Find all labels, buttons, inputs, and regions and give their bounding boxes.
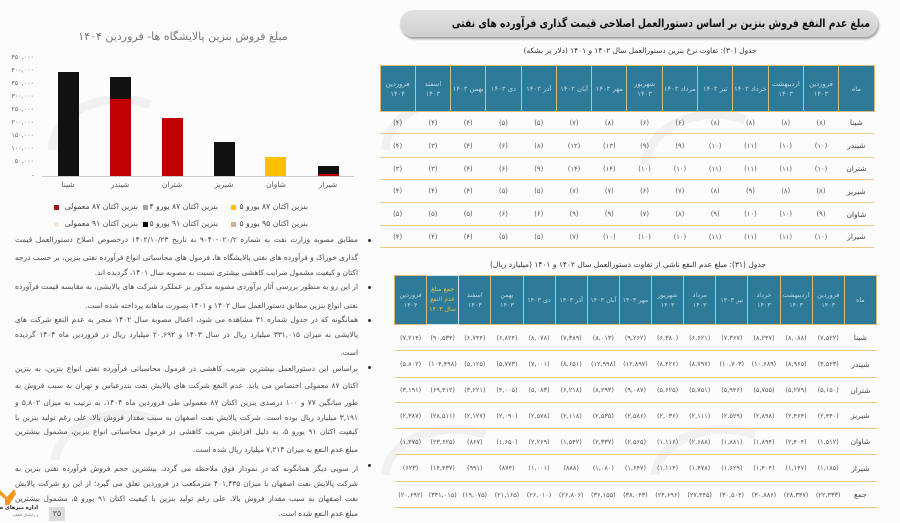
table 31: lost profit: ۱۴۰۳: [757, 301, 771, 309]
table 31: lost profit: (۲,۴۰۴): [786, 438, 807, 446]
table 31: lost profit: (۲,۰۳۶): [657, 412, 678, 420]
table 30: rate differences: (۱۱): [744, 232, 757, 240]
table 31: lost profit: شیریز: [851, 411, 870, 420]
y axis labels: ۵۰,۰۰۰: [15, 157, 34, 165]
table 30: rate differences: (۶): [499, 210, 508, 218]
table 30: rate differences: (۱۰): [638, 232, 651, 240]
baseline: [42, 176, 354, 177]
table 30: rate differences: شتران: [846, 164, 866, 173]
legend: بنزین اکتان ۸۷ یورو ۵: [239, 202, 308, 211]
y axis labels: ۲۰۰,۰۰۰: [11, 118, 34, 126]
table 31: lost profit: ۱۴۰۳: [821, 301, 835, 309]
table 30: rate differences: شینا: [850, 118, 863, 127]
table 31: lost profit: جمع: [854, 490, 867, 499]
table 30: rate differences: (۶): [499, 164, 508, 172]
table 31: lost profit: ۱۴۰۳: [789, 301, 803, 309]
table 31: lost profit: (۱۲,۹۹۸): [591, 360, 616, 368]
table 30: rate differences: اسفند: [425, 80, 441, 88]
table 30: rate differences: (۸): [817, 118, 826, 126]
table 31: lost profit: شاوان: [851, 437, 870, 446]
table 30: rate differences: (۸): [817, 187, 826, 195]
category labels: شاوان: [266, 180, 286, 189]
category labels: [61, 180, 337, 189]
table 31: lost profit: (۲,۵۷۸): [528, 412, 550, 420]
table 31: lost profit: (۱,۸۸۱): [721, 438, 742, 446]
text block: analysis paragraphs: براساس این دستورالعمل بیشترین ضریب کاهشی در فرمول محاسباتی فرآورده نفتی انواع بنزین، به بنزین: [15, 364, 358, 373]
table 30: rate differences: فروردین: [809, 80, 833, 88]
table 30: rate differences: شاوان: [847, 210, 866, 218]
table 31: lost profit: ۱۴۰۴: [404, 301, 417, 309]
table 31: lost profit: (۸۸۸): [563, 464, 579, 472]
table 30: rate differences: (۱۱): [779, 164, 792, 172]
table 30: rate differences: (۱۰): [815, 164, 827, 172]
y axis labels: ۲۵۰,۰۰۰: [11, 105, 34, 113]
table 30: rate differences: (۴): [464, 142, 473, 150]
category labels: شیراز: [319, 180, 337, 189]
y axis labels: ۳۰۰,۰۰۰: [11, 92, 34, 100]
table 31: lost profit: آذر ۱۴۰۳: [559, 296, 583, 304]
table 31: lost profit: تیر ۱۴۰۳: [720, 296, 743, 304]
table 30: rate differences: (۴): [393, 142, 402, 150]
table 31: lost profit: (۳,۲۲۱): [464, 386, 485, 394]
table 30: rate differences: (۱۰): [674, 232, 686, 240]
table 31: lost profit: (۲,۸۹۸): [753, 412, 774, 420]
table 30: rate differences: (۸): [781, 118, 790, 126]
category labels: شینا: [61, 180, 75, 189]
table 31: lost profit: شهریور: [658, 291, 678, 299]
table 31: lost profit: (۳۶,۱۵۵): [591, 490, 616, 498]
table 30: rate differences: (۴): [428, 232, 437, 240]
bar: Shana: [58, 72, 79, 176]
table 31: lost profit: (۸,۹۶۵): [786, 360, 807, 368]
y axis labels: ۱۰۰,۰۰۰: [11, 144, 34, 152]
table 31: lost profit: (۱,۶۲۹): [721, 464, 742, 472]
table 31: lost profit: شیراز: [851, 464, 869, 472]
category labels: شیندر: [111, 180, 129, 189]
table 30: rate differences: (۸): [675, 210, 684, 218]
legend: بنزین اکتان ۹۱ معمولی: [65, 219, 138, 228]
table 30: rate differences: (۱۰): [709, 142, 721, 150]
table 31: lost profit: (۲۰,۶۹۲): [398, 490, 423, 498]
category labels: شتران: [162, 180, 182, 189]
table 31: lost profit: (۶۲۳): [403, 464, 418, 472]
table 30: rate differences: (۴): [393, 187, 402, 195]
logo: orange mark and department name: [0, 489, 38, 517]
table 31: lost profit: (۴,۵۲۳): [818, 360, 839, 368]
table 31: lost profit: خرداد: [756, 291, 771, 299]
table 30: rate differences: (۴): [464, 232, 473, 240]
table 31: lost profit: عدم النفع: [430, 296, 455, 303]
table 30: rate differences: (۷): [605, 187, 614, 195]
table 30: rate differences: (۴): [464, 187, 473, 195]
table 30: rate differences: (۵): [393, 210, 402, 218]
table 31: lost profit: (۷,۳۶۷): [721, 334, 742, 342]
table 30: rate differences: (۶): [499, 142, 508, 150]
legend: بنزین اکتان ۹۱ یورو ۵: [149, 219, 218, 228]
table 31: lost profit: مرداد: [692, 291, 707, 299]
table 31: lost profit: (۱,۱۱۶): [657, 438, 678, 446]
table 31: lost profit: شینا: [854, 333, 867, 342]
table 30: rate differences: (۵): [428, 210, 437, 218]
table 31: lost profit: (۳۸,۰۴۳): [623, 490, 648, 498]
table 31: lost profit: (۳,۱۹۱): [400, 386, 421, 394]
table 31: lost profit: (۸۷۴): [499, 464, 515, 472]
table 31: lost profit: شتران: [850, 386, 870, 394]
bar: Shiraz stacked: [318, 166, 339, 176]
table 30: rate differences: (۱۰): [779, 210, 792, 218]
text block: analysis paragraphs: مبلغ عدم النفع شده است.: [278, 509, 358, 518]
table 30: rate differences: (۵): [534, 118, 543, 126]
table 30: rate differences: تیر ۱۴۰۳: [703, 84, 727, 92]
title text: مبلغ عدم النفع فروش بنزین بر اساس دستورالعمل اصلاحی قیمت گذاری فرآورده های نفتی: [452, 16, 870, 30]
table 31: lost profit: (۲,۱۱۸): [561, 412, 582, 420]
table 30: rate differences: (۱۱): [709, 164, 721, 172]
legend: بنزین اکتان ۸۷ یورو ۴: [149, 202, 218, 211]
table 31: lost profit: (۹,۲۶۲): [625, 334, 646, 342]
legend: بنزین اکتان ۹۵ یورو ۵: [239, 219, 308, 228]
table 31: lost profit: ۱۴۰۳: [693, 301, 707, 309]
table 30: rate differences: (۴): [464, 164, 473, 172]
table 30: rate differences: (۹): [605, 210, 614, 218]
table 31: lost profit: فروردین: [399, 291, 422, 299]
table 30: rate differences: ۱۴۰۳: [778, 90, 793, 98]
table 31: lost profit: (۶۹,۴۱۲): [430, 386, 455, 394]
table 31: lost profit: (۲۶,۸۰۶): [559, 490, 583, 498]
table 30: rate differences: (۵): [499, 187, 508, 195]
table 31: lost profit: (۵,۰۸۳): [528, 386, 550, 394]
table 30: rate differences: (۷): [675, 187, 684, 195]
table 31: lost profit: ۱۴۰۳: [468, 301, 482, 309]
table 30: rate differences: (۹): [570, 210, 579, 218]
table 30: rate differences: (۵): [499, 232, 508, 240]
text block: analysis paragraphs: پالایشی به میزان ۳۳۱,۰۱۵ میلیارد ریال در سال ۱۴۰۳ و ۲۰,۶۹۲ میلیارد ریال در فروردین ماه ۱۴۰۴ گردیده: [15, 330, 358, 339]
table 31: lost profit: (۹۹۱): [467, 464, 483, 472]
table 31: lost profit: (۲,۱۲۷): [464, 412, 485, 420]
table 30: rate differences: (۹): [817, 210, 826, 218]
table 31: lost profit: (۲,۴۴۰): [818, 412, 839, 420]
table 31: lost profit: (۱,۴۰۴): [753, 464, 774, 472]
table 31: lost profit: (۸۶۷): [467, 438, 483, 446]
table 31: lost profit: (۳۳۱,۰۱۵): [429, 490, 457, 498]
table 31: lost profit: (۲۶,۰۱۰): [527, 490, 551, 498]
logo: orange mark and department name: و رایانه‌ای تحلیلی: [13, 513, 38, 517]
table 31: lost profit: سال ۱۴۰۳: [429, 306, 456, 313]
table 30: rate differences: (۱۱): [744, 142, 757, 150]
table 30: rate differences: (۱۰): [674, 164, 686, 172]
table 30: rate differences: (۱۰): [779, 142, 792, 150]
table 30: rate differences: (۷): [640, 210, 649, 218]
table 30 caption: جدول (۳۰): تفاوت نرخ بنزین دستورالعمل سال ۱۴۰۲ و ۱۴۰۱ (دلار بر بشکه): [523, 46, 756, 55]
table 31: lost profit: (۱۹,۰۷۵): [462, 490, 487, 498]
legend: بنزین اکتان ۸۷ معمولی: [65, 202, 138, 211]
table 31: lost profit: (۵,۹۴۶): [721, 386, 742, 394]
table 31: lost profit: مهر ۱۴۰۳: [623, 296, 648, 304]
chart: gasoline sales by refinery: [11, 30, 354, 228]
table 31: lost profit: (۱۲,۸۹۷): [623, 360, 648, 368]
table 31: lost profit: (۴,۰۰۵): [496, 386, 517, 394]
table 30: rate differences: (۸): [534, 142, 543, 150]
table 30: rate differences: (۳): [393, 164, 402, 172]
table 31: lost profit: (۶,۷۴۴): [464, 334, 485, 342]
text block: analysis paragraphs: نفتی انواع بنزین مطابق دستورالعمل سال ۱۴۰۲ و ۱۴۰۱ بصورت ماهانه پرداخته شده است.: [85, 301, 358, 310]
table 31: lost profit: آبان ۱۴۰۳: [590, 296, 616, 304]
table 31: lost profit: اسفند: [467, 291, 483, 299]
table 31: lost profit: (۲,۳۳۷): [593, 438, 614, 446]
table 31: lost profit: (۱,۶۴۷): [625, 464, 646, 472]
table 31: lost profit: (۶,۲۱۸): [561, 386, 582, 394]
table 31: lost profit: (۲,۵۶۵): [625, 438, 646, 446]
table 31: lost profit: (۸,۰۱۳): [593, 334, 614, 342]
table 31: lost profit: (۲۴,۶۹۶): [655, 490, 680, 498]
table 30: rate differences: (۶): [675, 118, 684, 126]
table 31: lost profit: (۲۳,۶۲۵): [430, 438, 455, 446]
table 30: rate differences: (۵): [534, 187, 543, 195]
table 31: lost profit: (۵,۷۷۳): [496, 360, 517, 368]
text block: analysis paragraphs: نفت اصفهان به سبب مقدار فروش بالا، علی رغم تولید بنزین با کیفیت اکتان ۹۱ یورو ۵، مشمول بیشترین: [15, 494, 358, 503]
table 31: lost profit: (۱۰,۷۰۳): [720, 360, 744, 368]
table 31: lost profit: (۷,۰۰۱): [528, 360, 550, 368]
table 31: lost profit: (۳۰,۵۰۴): [720, 490, 744, 498]
text block: analysis paragraphs: اکتان و کیفیت مشمول ضرایب کاهشی بیشتری نسبت به مصوبه سال ۱۴۰۱، گردیده اند.: [95, 268, 358, 277]
table 30: rate differences: (۴): [464, 118, 473, 126]
table 30: rate differences: (۵): [499, 118, 508, 126]
table 31: lost profit: (۷,۳۸۹): [561, 334, 582, 342]
text block: analysis paragraphs: از این رو به منظور بررسی آثار برآوردی مصوبه مذکور بر عملکرد شرکت های پالایشی، به مقایسه قیمت فرآورده: [15, 282, 358, 291]
table 31: lost profit: (۱,۶۵۰): [496, 438, 517, 446]
text block: analysis paragraphs: مبلغ عدم النفع به میزان ۷,۲۱۴ میلیارد ریال شده است.: [193, 445, 358, 454]
y axis labels: -: [32, 171, 34, 179]
text block: analysis paragraphs: از سویی دیگر همانگونه که در نمودار فوق ملاحظه می گردد، بیشترین حجم فروش فرآورده نفتی بنزین به: [15, 464, 358, 473]
table 30: rate differences: (۵): [464, 210, 473, 218]
page number: [49, 507, 65, 521]
table 31: lost profit: (۲۸,۳۴۷): [784, 490, 808, 498]
legend: [54, 202, 308, 228]
table 31: lost profit: ماه: [856, 296, 865, 304]
table 31: lost profit: (۵,۲۷۹): [786, 386, 807, 394]
table 31: lost profit: (۱,۱۴۷): [786, 464, 807, 472]
table 30: rate differences: (۹): [640, 142, 649, 150]
table 30: rate differences: (۱۱): [744, 164, 757, 172]
table 30: rate differences: (۷): [570, 118, 579, 126]
text block: analysis paragraphs: کیفیت اکتان ۹۱ یورو ۵، به دلیل افزایش ضریب کاهشی در فرمول محاسباتی انواع بنزین، مشمول بیشترین: [15, 427, 358, 436]
table 31: lost profit: (۲,۰۹۰): [496, 412, 517, 420]
table 30: rate differences: (۱۱): [709, 232, 721, 240]
y axis labels: ۱۵۰,۰۰۰: [11, 131, 34, 139]
table 31: lost profit: (۸,۲۹۳): [593, 386, 614, 394]
table 31: lost profit: [394, 275, 877, 508]
table 31: lost profit: (۱,۱۱۴): [657, 464, 678, 472]
category labels: شیریز: [215, 180, 233, 189]
table 30: rate differences: (۸): [711, 118, 720, 126]
table 30: rate differences: (۶): [640, 187, 649, 195]
table 30: rate differences: (۴): [393, 232, 402, 240]
text block: analysis paragraphs: طور میانگین ۷۷ و ۱۰۰ درصدی بنزین اکتان ۸۷ معمولی طی فروردین ماه ۱۴۰۴، به ترتیب به میزان ۵,۸۰۲ و: [15, 398, 358, 407]
table 31: lost profit: (۱,۵۴۲): [561, 438, 582, 446]
chart title: مبلغ فروش بنزین پالایشگاه ها- فروردین ۱۴۰۴: [78, 30, 288, 43]
table 31: lost profit: (۲۷,۴۴۵): [687, 490, 712, 498]
table 30: rate differences: (۱۳): [603, 142, 616, 150]
table 31: lost profit: (۲,۶۸۸): [689, 438, 710, 446]
table 31: lost profit: (۸,۰۸۸): [786, 334, 807, 342]
text block: analysis paragraphs: گذاری خوراک و فرآورده های نفتی پالایشگاه ها، فرمول های محاسباتی انواع فرآورده نفتی بنزین، بر حسب درجه: [15, 253, 358, 262]
table 30: rate differences: خرداد ۱۴۰۳: [734, 84, 767, 92]
table 30: rate differences: ۱۴۰۴: [390, 90, 405, 98]
table 30: rate differences: (۴): [428, 187, 437, 195]
table 30: rate differences: ماه: [852, 84, 861, 92]
table 30: rate differences: (۹): [746, 187, 755, 195]
table 31: lost profit: (۶,۳۸۰): [657, 334, 678, 342]
table 30: rate differences: شیندر: [847, 141, 865, 150]
table 30: rate differences: (۱۴): [568, 164, 580, 172]
table 31: lost profit: (۸,۰۷۸): [528, 334, 550, 342]
table 30: rate differences: (۶): [640, 118, 649, 126]
table 30: rate differences: بهمن ۱۴۰۳: [453, 84, 484, 92]
table 31: lost profit: (۹۰,۵۳۴): [430, 334, 455, 342]
table 30: rate differences: (۹): [534, 164, 543, 172]
table 31: lost profit: (۱,۰۸۰): [593, 464, 614, 472]
table 30: rate differences: شهریور: [634, 80, 655, 88]
table 30: rate differences: ۱۴۰۳: [814, 90, 828, 98]
table 31: lost profit: (۳۰,۸۸۶): [752, 490, 776, 498]
table 31: lost profit: (۵,۷۵۱): [689, 386, 710, 394]
table 30: rate differences: (۱۱): [779, 232, 792, 240]
table 30: rate differences: (۴): [428, 118, 437, 126]
table 31 caption: جدول (۳۱): مبلغ عدم النفع ناشی از تفاوت دستورالعمل سال ۱۴۰۲ و ۱۴۰۱ (میلیارد ریال): [490, 260, 766, 269]
page number: ۳۵: [53, 509, 61, 518]
y axis labels: [11, 53, 34, 179]
table 31: lost profit: (۲,۱۱۱): [689, 412, 710, 420]
table 30: rate differences: (۵): [534, 232, 543, 240]
table 31: lost profit: (۲,۲۶۹): [528, 438, 550, 446]
table 31: lost profit: جمع مبلغ: [431, 286, 454, 293]
table 30: rate differences: دی ۱۴۰۳: [491, 84, 516, 92]
table 30: rate differences: ۱۴۰۳: [426, 90, 440, 98]
table 30: rate differences: (۹): [675, 142, 684, 150]
table 30: rate differences: (۸): [605, 118, 614, 126]
table 31: lost profit: بهمن: [500, 291, 514, 299]
table 30: rate differences: شیراز: [847, 232, 865, 241]
table 30: rate differences: مهر ۱۴۰۳: [596, 84, 623, 92]
table 31: lost profit: دی ۱۴۰۳: [527, 296, 551, 304]
bar: Shatran: [162, 118, 183, 176]
table 31: lost profit: (۲۸,۵۱۱): [430, 412, 455, 420]
table 31: lost profit: (۵,۸۰۲): [400, 360, 421, 368]
table 31: lost profit: (۵,۱۵۰): [818, 386, 839, 394]
table 30: rate differences: (۷): [570, 232, 579, 240]
table 31: lost profit: (۲,۵۳۵): [593, 412, 614, 420]
table 31: lost profit: (۱,۵۱۲): [818, 438, 839, 446]
table 30: rate differences: (۷): [570, 187, 579, 195]
table 31: lost profit: (۶,۶۲۱): [689, 334, 710, 342]
table 30: rate differences: ۱۴۰۳: [637, 90, 652, 98]
table 30: rate differences: (۳): [428, 164, 437, 172]
table 30: rate differences: (۱۰): [744, 210, 757, 218]
table 31: lost profit: ۱۴۰۳: [661, 301, 674, 309]
table 31: lost profit: (۶,۸۲۴): [496, 334, 517, 342]
bar: Shavan: [265, 157, 286, 176]
table 31: lost profit: ۱۴۰۳: [500, 301, 514, 309]
table 31: lost profit: (۵,۷۵۵): [753, 386, 774, 394]
table 31: lost profit: (۲,۴۶۴): [786, 412, 807, 420]
table 31: lost profit: (۸,۴۲۶): [657, 360, 678, 368]
table 30: rate differences: اردیبهشت: [772, 80, 800, 88]
text block: analysis paragraphs: [14, 235, 371, 518]
table 31: lost profit: (۸,۷۹۷): [689, 360, 710, 368]
table 31: lost profit: (۵,۱۲۵): [464, 360, 485, 368]
table 31: lost profit: (۸,۶۵۱): [561, 360, 582, 368]
text block: analysis paragraphs: همانگونه که در جدول شماره ۳۱ مشاهده می شود، اعمال مصوبه سال ۱۴۰۲ منجر به عدم النفع شرکت های: [15, 315, 358, 324]
table 30: rate differences: آبان ۱۴۰۳: [560, 84, 588, 92]
table 31: lost profit: (۲,۵۲۹): [721, 412, 742, 420]
text block: analysis paragraphs: اکتان ۸۷ معمولی اختصاص می یابد. عدم النفع شرکت های پالایش نفت بندرعباس و تهران به سبب فروش به: [15, 381, 358, 390]
table 30: rate differences: (۸): [711, 187, 720, 195]
table 30: rate differences: (۱۲): [568, 142, 580, 150]
bar: Shinder stacked: [110, 77, 131, 176]
y axis labels: ۴۵۰,۰۰۰: [11, 53, 34, 61]
table 30: rate differences: مرداد ۱۴۰۳: [664, 84, 696, 92]
table 31: lost profit: (۱۰,۶۸۹): [752, 360, 776, 368]
table 31: lost profit: (۷,۵۲۲): [818, 334, 839, 342]
table 30: rate differences: (۱۰): [815, 232, 827, 240]
table 31: lost profit: (۲,۵۸۶): [625, 412, 646, 420]
bar: Shiriz: [214, 142, 235, 176]
table 30: rate differences: [380, 65, 875, 248]
table 31: lost profit: (۲,۳۸۷): [400, 412, 421, 420]
text block: analysis paragraphs: ۳,۱۹۱ میلیارد ریال بوده است. شرکت پالایش نفت اصفهان به سبب مقدار فروش بالا، علی رغم تولید بنزین با: [15, 413, 358, 422]
table 31: lost profit: (۹,۰۸۷): [625, 386, 646, 394]
table 31: lost profit: (۲۱,۱۶۵): [495, 490, 519, 498]
table 30: rate differences: (۱۴): [603, 164, 616, 172]
table 31: lost profit: (۱۰۴,۴۹۸): [429, 360, 457, 368]
table 30: rate differences: (۹): [711, 210, 720, 218]
table 30: rate differences: (۸): [746, 118, 755, 126]
text block: analysis paragraphs: مطابق مصوبه وزارت نفت به شماره ۰۲۰/۲-۹۰۴۰ به تاریخ ۱۴۰۲/۱۰/۲۳ درخصوص اصلاح دستورالعمل قیمت: [15, 235, 358, 244]
table 31: lost profit: (۱۴,۴۳۷): [430, 464, 455, 472]
table 31: lost profit: (۷,۲۱۴): [400, 334, 421, 342]
title banner: [400, 10, 878, 37]
table 30: rate differences: (۳): [428, 142, 437, 150]
y axis labels: ۴۰۰,۰۰۰: [11, 66, 34, 74]
table 31: lost profit: (۲۲,۳۳۳): [816, 490, 840, 498]
table 31: lost profit: (۱,۰۰۱): [528, 464, 550, 472]
table 31: lost profit: (۱,۴۷۵): [400, 438, 421, 446]
table 30: rate differences: (۴): [393, 118, 402, 126]
table 31: lost profit: اردیبهشت: [783, 291, 809, 299]
table 31: lost profit: (۱,۱۸۵): [818, 464, 839, 472]
table 30: rate differences: (۶): [534, 210, 543, 218]
table 31: lost profit: (۱,۸۹۴): [753, 438, 774, 446]
table 31: lost profit: (۱,۴۷۸): [689, 464, 710, 472]
text block: analysis paragraphs: است.: [340, 348, 358, 357]
table 31: lost profit: (۸,۲۴۷): [753, 334, 774, 342]
y axis labels: ۳۵۰,۰۰۰: [11, 79, 34, 87]
table 30: rate differences: آذر ۱۴۰۳: [526, 84, 551, 92]
table 30: rate differences: (۱۰): [815, 142, 827, 150]
table 31: lost profit: فروردین: [817, 291, 839, 299]
table 30: rate differences: (۸): [781, 187, 790, 195]
text block: analysis paragraphs: شرکت پالایش نفت اصفهان با میزان ۴۰۱,۴۳۵ مترمکعب در فروردین تعلق می گیرد؛ از این رو شرکت پالایش: [15, 479, 358, 488]
table 30: rate differences: (۱۰): [603, 232, 616, 240]
table 31: lost profit: شیندر: [851, 360, 869, 368]
table 30: rate differences: (۱۰): [638, 164, 651, 172]
table 31: lost profit: (۵,۶۲۵): [657, 386, 678, 394]
table 30: rate differences: فروردین: [386, 80, 409, 88]
table 30: rate differences: شیریز: [847, 186, 866, 196]
